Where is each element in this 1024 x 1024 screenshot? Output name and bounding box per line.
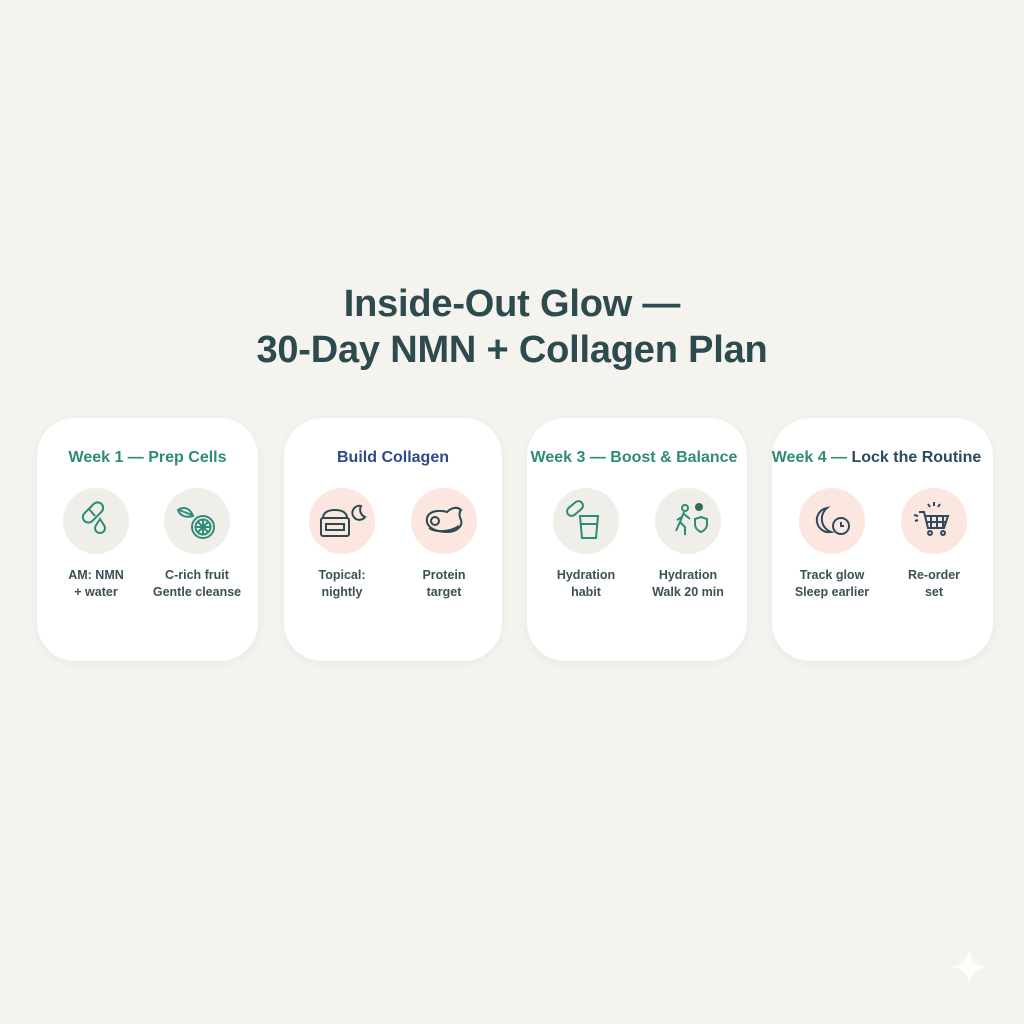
label (422, 568, 466, 599)
label: Topical: (318, 568, 366, 582)
icon: moon clock (799, 488, 865, 554)
icon: citrus leaf (164, 488, 230, 554)
label (68, 568, 124, 599)
panel: week 2 (284, 418, 502, 661)
title: 30-Day NMN + Collagen Plan (256, 329, 768, 371)
label (652, 568, 724, 599)
heading: week 4: Week 4 — Lock the Routine (772, 449, 981, 466)
icon: walker shield (655, 488, 721, 554)
icon: shopping cart (901, 488, 967, 554)
label: C-rich fruit (165, 568, 229, 582)
label: Hydration (659, 568, 717, 582)
panel: week 4 (772, 418, 993, 661)
panel: week 3 (527, 418, 747, 661)
label: + water (74, 585, 118, 599)
icon: sparkle (951, 949, 987, 985)
label: nightly (322, 585, 362, 599)
label: Gentle cleanse (153, 585, 241, 599)
icon: steak (411, 488, 477, 554)
icon: capsule and drop (63, 488, 129, 554)
title (256, 283, 768, 371)
label: Protein (422, 568, 466, 582)
label: habit (571, 585, 601, 599)
label: AM: NMN (68, 568, 124, 582)
label (795, 568, 869, 599)
icon: cream jar moon (309, 488, 375, 554)
heading: week 2: Build Collagen (337, 449, 449, 466)
label: target (427, 585, 461, 599)
label: Walk 20 min (652, 585, 724, 599)
heading: week 1: Week 1 — Prep Cells (68, 449, 226, 466)
label: Track glow (800, 568, 864, 582)
label: set (925, 585, 943, 599)
label (908, 568, 960, 599)
label (318, 568, 366, 599)
label: Re-order (908, 568, 960, 582)
panel: week 1 (37, 418, 258, 661)
label: Hydration (557, 568, 615, 582)
label (153, 568, 241, 599)
label: Sleep earlier (795, 585, 869, 599)
heading: week 3: Week 3 — Boost & Balance (531, 449, 737, 466)
title: Inside-Out Glow — (344, 283, 680, 325)
label (557, 568, 615, 599)
icon: capsule glass (553, 488, 619, 554)
